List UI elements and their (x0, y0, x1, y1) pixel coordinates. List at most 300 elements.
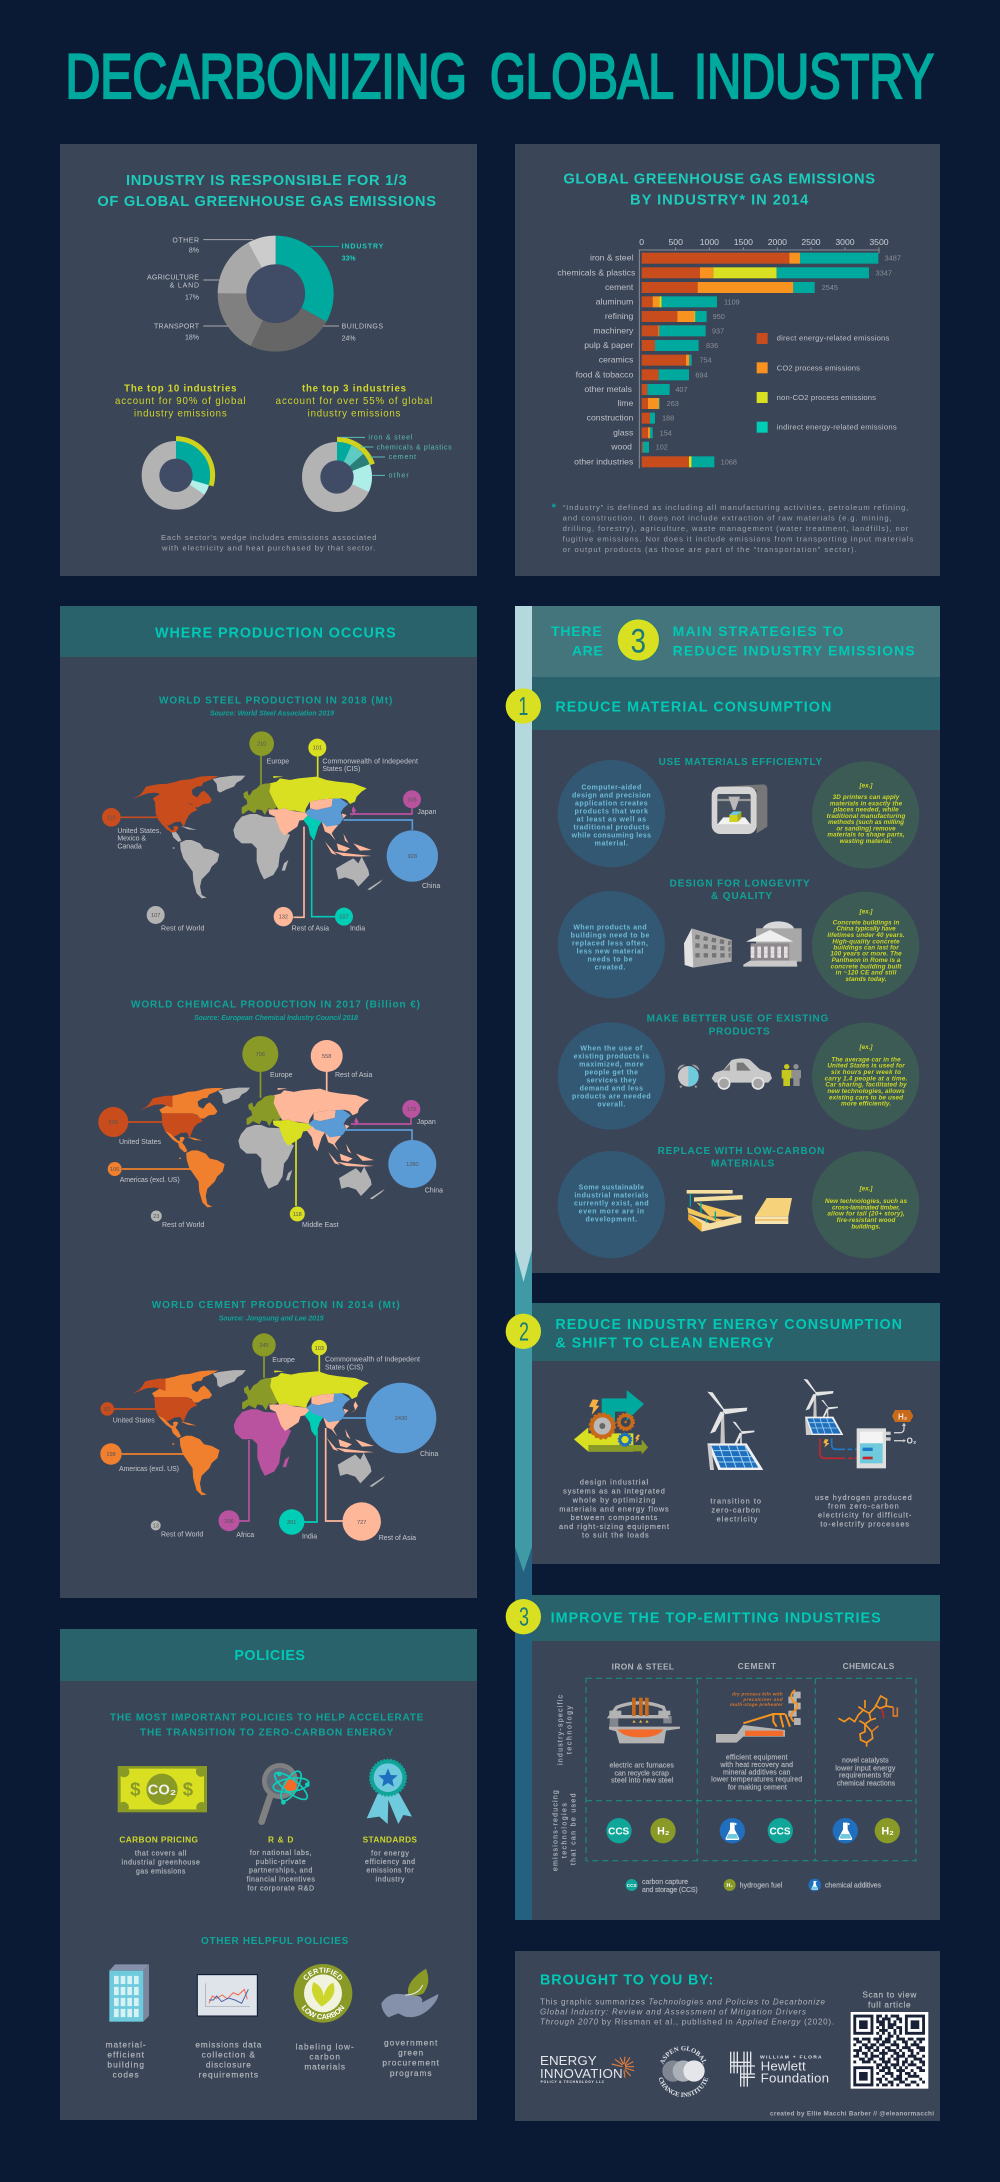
map: cement production: 301 (287, 1520, 296, 1526)
map: steel production: United States, (117, 828, 161, 835)
legend: technologies: carbon capture (642, 1879, 688, 1886)
text: procurement: government (384, 2038, 438, 2048)
badges: technologies: H₂ (881, 1825, 894, 1837)
bar chart: emissions: 3487 (885, 254, 901, 263)
block: replace with low-carbon materials: currently exist, and (574, 1201, 649, 1208)
heading: industry share: OF GLOBAL GREENHOUSE GAS EMISSIONS (97, 194, 436, 210)
subheading: other helpful policies: OTHER HELPFUL POLICIES (201, 1936, 349, 1947)
panel: three main strategies header (532, 606, 940, 677)
block: use materials efficiently: wasting material. (840, 838, 893, 845)
heading: strategy 2: & SHIFT TO CLEAN ENERGY (555, 1335, 774, 1351)
block: design for longevity (558, 879, 919, 999)
logo: Hewlett Foundation: Hewlett (761, 2059, 806, 2074)
callout: top 3 industries (276, 383, 432, 420)
heading: policies: POLICIES (234, 1648, 305, 1664)
map: chemical production: 106 (110, 1167, 119, 1173)
block: design for longevity: High-quality concrete (832, 938, 900, 945)
map: steel production: 132 (279, 915, 288, 921)
bar chart: emissions: aluminum (596, 296, 633, 306)
icon: cement kiln (716, 1690, 801, 1743)
heading: where production occurs: WHERE PRODUCTION OCCURS (155, 625, 396, 641)
title (66, 42, 934, 112)
text: carbon pricing: industrial greenhouse (121, 1860, 200, 1867)
footnote: definition of industry: * (552, 502, 557, 514)
icon: standards ribbon (367, 1760, 412, 1824)
donut chart: sectors: 17% (185, 294, 199, 301)
map: chemical production: 506 (109, 1120, 118, 1126)
text: emissions data: requirements (199, 2069, 258, 2079)
bar chart: emissions: glass (613, 427, 634, 437)
icon: cement kiln: precalciner and (742, 1697, 783, 1702)
logo: Hewlett Foundation: Foundation (761, 2071, 829, 2086)
text: scan prompt: full article (868, 1999, 911, 2009)
bar chart: emissions: construction (587, 413, 634, 423)
bar chart: emissions: other metals (584, 384, 633, 394)
block: use materials efficiently (558, 757, 919, 869)
text: R and D: for national labs, (250, 1850, 312, 1857)
icon: electric arc furnace (609, 1698, 680, 1743)
icon: green procurement hand (381, 1969, 438, 2017)
legend: emission types (757, 333, 897, 433)
icon: integrated system gears and arrows (574, 1390, 648, 1455)
icon: cement kiln: dry process kiln with (732, 1692, 783, 1697)
text: hydrogen: from zero-carbon (828, 1502, 899, 1511)
icon: 3D printer (712, 784, 767, 834)
note: wedge explanation: Each sector's wedge includes emissions associated (161, 533, 376, 542)
icon: concrete buildings (684, 921, 802, 968)
block: make better use of existing products: carry 1.4 people at a time. (825, 1075, 908, 1082)
legend: emission types: CO2 process emissions (777, 363, 860, 372)
block: replace with low-carbon materials: cross-laminated timber, (832, 1204, 900, 1211)
block: make better use of existing products: MAKE BETTER USE OF EXISTING (647, 1014, 829, 1025)
footnote: definition of industry (552, 502, 914, 554)
panel: emissions by industry (515, 144, 940, 576)
text: arc furnaces (609, 1763, 674, 1785)
legend: emission types: non-CO2 process emissions (777, 393, 876, 402)
logo: Aspen Global Change Institute (658, 2046, 708, 2098)
block: use materials efficiently: places needed, while (832, 807, 899, 814)
block: design for longevity: less new material (577, 948, 643, 955)
text: labeling (295, 2042, 354, 2072)
block: design for longevity: needs to be (587, 956, 633, 963)
block: design for longevity: concrete building built (831, 963, 902, 970)
chart heading: steel (159, 696, 392, 718)
donut chart: sectors: AGRICULTURE (147, 274, 199, 281)
map: cement production: Europe (272, 1357, 295, 1364)
block: make better use of existing products: demand and less (580, 1085, 643, 1092)
block: use materials efficiently: while consuming less (571, 832, 651, 839)
bar chart: emissions: 1500 (734, 237, 753, 247)
text: hydrogen: electricity for difficult- (818, 1511, 912, 1520)
map: chemical production: Rest of Asia (335, 1072, 372, 1079)
text: R and D (246, 1835, 315, 1892)
legend: technologies: hydrogen fuel (740, 1882, 783, 1889)
footnote: definition of industry: “Industry” is defined as including all manufacturing activities, petroleum refining, (563, 503, 908, 512)
text: zero-carbon electricity: transition to (710, 1497, 761, 1506)
map: steel production: 107 (151, 913, 160, 919)
panel: strategy 3 improve top-emitting industries (506, 1595, 940, 1920)
map: cement production: 82 (104, 1407, 110, 1413)
text: efficient equipment: efficient equipment (726, 1754, 788, 1761)
text: standards: efficiency and (365, 1859, 415, 1866)
icon: clock car and people (677, 1058, 801, 1089)
heading: strategy 2 (506, 1314, 902, 1351)
callout: top 10 industries: account for 90% of global (115, 396, 246, 407)
text: design systems: whole by optimizing (572, 1495, 655, 1504)
text: hydrogen: to-electrify processes (820, 1520, 909, 1529)
map: steel production: India (350, 926, 365, 933)
text: efficient equipment (711, 1754, 802, 1791)
map: steel production: 210 (257, 742, 266, 748)
text: carbon pricing (119, 1835, 200, 1876)
icon: emissions data chart (197, 1975, 257, 2016)
donut: top 3 industries: iron & steel (368, 435, 413, 442)
donut: top 3 industries: chemicals & plastics (377, 444, 452, 451)
column headings: CHEMICALS (843, 1661, 895, 1671)
map: steel production: Commonwealth of Indepedent (322, 758, 418, 765)
chart heading: steel: Source: World Steel Association 2019 (210, 711, 334, 718)
map: chemical production (98, 1036, 443, 1229)
panel: three main strategies header: ARE (572, 643, 603, 659)
footnote: definition of industry: and construction. It does not include extraction of raw materials (e.g. mining, (563, 514, 892, 523)
heading: strategy 2: 2 (519, 1316, 529, 1346)
map: steel production: 119 (107, 815, 116, 821)
logo: Aspen Global Change Institute: ASPEN GLOBAL (660, 2046, 706, 2065)
bar chart: emissions: food & tobacco (576, 369, 634, 379)
text: design systems: systems as an integrated (563, 1487, 665, 1496)
credit line: created by Ellie Macchi Barber // @eleanormacchi (770, 2110, 934, 2117)
block: replace with low-carbon materials: even more are in (579, 1209, 644, 1216)
block: replace with low-carbon materials: REPLACE WITH LOW-CARBON (658, 1146, 824, 1157)
map: steel production: States (CIS) (322, 766, 360, 773)
text: procurement: green (398, 2048, 424, 2058)
footnote: definition of industry: fugitive emissions. Nor does it include emissions from transporting input materials (563, 535, 914, 544)
map: cement production: India (302, 1534, 317, 1540)
block: make better use of existing products: new technologies, allows (827, 1088, 905, 1095)
heading: strategy 1 (506, 688, 831, 724)
heading: industry share: INDUSTRY IS RESPONSIBLE FOR 1/3 (126, 173, 407, 189)
callout: top 10 industries: industry emissions (134, 409, 227, 420)
text: standards (363, 1834, 417, 1884)
map: cement production: Rest of Asia (379, 1535, 416, 1542)
map: steel production: Japan (417, 809, 436, 816)
bar chart: emissions: 102 (656, 443, 668, 452)
note: wedge explanation: with electricity and heat purchased by that sector. (161, 544, 375, 553)
bar chart: emissions: 500 (668, 237, 683, 247)
block: design for longevity: in ~120 CE and still (836, 970, 897, 977)
legend: technologies (626, 1879, 881, 1894)
panel: three main strategies header: MAIN STRATEGIES TO (673, 623, 843, 639)
bar chart: emissions: 2545 (822, 283, 838, 292)
callout: top 3 industries: account for over 55% of global (276, 396, 432, 407)
block: design for longevity: DESIGN FOR LONGEVITY (670, 879, 810, 890)
text: building codes (106, 2039, 146, 2079)
block: design for longevity: buildings can last for (833, 945, 899, 952)
block: replace with low-carbon materials: allow for tall (20+ story), (827, 1211, 905, 1218)
panel: credits (515, 1951, 940, 2121)
icon: hydrogen production: H₂ (898, 1412, 908, 1421)
text: novel catalysts: requirements for (839, 1773, 892, 1780)
chart heading: cement: WORLD CEMENT PRODUCTION IN 2014 (Mt) (152, 1300, 400, 1311)
panel: three main strategies header: 3 (631, 623, 646, 661)
text: design systems: design industrial (580, 1478, 649, 1487)
text: standards: industry (375, 1877, 405, 1884)
block: replace with low-carbon materials: buildings. (851, 1223, 881, 1230)
block: use materials efficiently: application creates (575, 800, 648, 807)
block: make better use of existing products: United States is used for (827, 1063, 905, 1070)
donut chart: sectors (147, 237, 384, 342)
bar chart: emissions: 3347 (876, 268, 892, 277)
text: building codes: material- (106, 2039, 146, 2049)
chart heading: steel: WORLD STEEL PRODUCTION IN 2018 (Mt) (159, 696, 392, 707)
block: make better use of existing products: When the use of (580, 1046, 643, 1053)
text: zero-carbon electricity: electricity (717, 1515, 758, 1524)
map: cement production: 206 (224, 1519, 234, 1525)
panel: three main strategies header: REDUCE INDUSTRY EMISSIONS (673, 643, 915, 659)
block: replace with low-carbon materials: New technologies, such as (825, 1198, 907, 1205)
text: R and D: R & D (268, 1835, 293, 1845)
map: chemical production: 706 (256, 1052, 265, 1058)
text: emissions data: disclosure (206, 2059, 251, 2069)
text: efficient equipment: with heat recovery and (719, 1762, 793, 1769)
icon: catalyst molecule (838, 1696, 897, 1747)
map: chemical production: 179 (407, 1107, 416, 1113)
heading: strategy 2: REDUCE INDUSTRY ENERGY CONSUMPTION (555, 1317, 902, 1333)
map: cement production: 727 (357, 1520, 366, 1526)
column headings: CEMENT (738, 1661, 776, 1671)
block: design for longevity: & QUALITY (711, 891, 772, 902)
map: steel production: 928 (408, 854, 417, 860)
bar chart: emissions: iron & steel (590, 253, 633, 263)
map: cement production: 2430 (395, 1416, 407, 1422)
column headings (612, 1661, 895, 1671)
bar chart: emissions: 263 (667, 399, 679, 408)
bar chart: emissions: 2500 (801, 237, 821, 247)
heading: industry share (97, 173, 436, 210)
map: chemical production: 118 (293, 1212, 302, 1218)
block: make better use of existing products: existing cars to be used (829, 1094, 903, 1101)
map: cement production: 13 (153, 1524, 159, 1530)
text: standards: emissions for (366, 1868, 414, 1875)
text: emissions data: emissions data (195, 2039, 262, 2049)
block: design for longevity: 100 years or more. The (830, 951, 902, 958)
callout: top 10 industries (115, 383, 246, 420)
badges: technologies: CCS (608, 1826, 630, 1837)
donut chart: sectors: & LAND (170, 282, 199, 289)
text: standards: for energy (371, 1850, 409, 1857)
heading: brought to you by: BROUGHT TO YOU BY: (540, 1973, 713, 1989)
map: steel production (102, 731, 440, 933)
heading: strategy 3: 3 (519, 1602, 529, 1632)
block: use materials efficiently: methods (such as milling (828, 819, 904, 826)
subheading: most important policies: THE TRANSITION TO ZERO-CARBON ENERGY (140, 1727, 394, 1738)
text: building codes: building (107, 2059, 144, 2069)
logo: Hewlett Foundation: WILLIAM + FLORA (760, 2054, 822, 2060)
chart heading: chemicals: WORLD CHEMICAL PRODUCTION IN 2017 (Billion €) (131, 1000, 420, 1011)
row labels: emissions-reducing (553, 1790, 560, 1871)
row labels: technology (567, 1705, 574, 1754)
row labels: that can be used (570, 1793, 577, 1865)
map: steel production: 105 (407, 797, 417, 803)
subheading: most important policies: THE MOST IMPORTANT POLICIES TO HELP ACCELERATE (110, 1713, 424, 1724)
map: chemical production: Americas (excl. US) (120, 1177, 180, 1184)
icon: cement kiln: multi-stage preheater (730, 1702, 784, 1707)
map: chemical production: 23 (153, 1214, 159, 1220)
donut chart: sectors: INDUSTRY (342, 243, 384, 250)
block: make better use of existing products: maximized, more (579, 1062, 644, 1069)
text: design systems: between components (571, 1513, 658, 1522)
map: cement production: 245 (259, 1343, 269, 1349)
badges: technologies: CCS (769, 1826, 791, 1837)
logo: Energy Innovation (540, 2053, 634, 2084)
heading: emissions by industry (563, 171, 875, 209)
icon: carbon pricing banknote: CO₂ (148, 1783, 176, 1799)
bar chart: emissions: 754 (699, 356, 712, 365)
heading: strategy 3: IMPROVE THE TOP-EMITTING INDUSTRIES (551, 1611, 881, 1627)
logo: Energy Innovation: ENERGY (540, 2053, 597, 2068)
block: replace with low-carbon materials: industrial materials (574, 1193, 648, 1200)
heading: strategy 1: 1 (518, 691, 528, 721)
donut chart: sectors: OTHER (172, 237, 199, 244)
icon: research magnifier and atom (262, 1765, 311, 1822)
bar chart: emissions: lime (617, 398, 634, 408)
donut: top 3 industries (299, 435, 452, 515)
bar chart: emissions: cement (605, 282, 634, 292)
icon: wind turbines and solar panel (707, 1392, 763, 1470)
block: make better use of existing products: products are needed (572, 1093, 651, 1100)
row labels: technologies (562, 1803, 569, 1858)
block: use materials efficiently: or sanding) remove (836, 825, 896, 832)
legend: emission types: direct energy-related emissions (777, 334, 890, 343)
block: design for longevity: created. (595, 964, 625, 971)
legend: technologies: and storage (CCS) (642, 1887, 698, 1894)
bar chart: emissions: refining (605, 311, 634, 321)
heading: strategy 3 (506, 1599, 881, 1634)
donut chart: sectors: 33% (342, 255, 356, 262)
block: design for longevity: Concrete buildings in (833, 920, 899, 927)
map: cement production: Americas (excl. US) (119, 1466, 179, 1473)
text: carbon pricing: gas emissions (136, 1869, 186, 1876)
block: make better use of existing products: services they (586, 1078, 636, 1085)
text: efficient equipment: mineral additives can (723, 1769, 790, 1776)
chart heading: chemicals: Source: European Chemical Industry Council 2018 (194, 1015, 358, 1022)
text: zero-carbon electricity: zero-carbon (711, 1506, 760, 1515)
bar chart: emissions: 2000 (768, 237, 787, 247)
block: use materials efficiently: materials in exactly the (830, 800, 903, 807)
row labels (553, 1694, 577, 1871)
row labels: industry-specific (557, 1694, 564, 1765)
text: carbon pricing: that covers all (135, 1851, 187, 1858)
text: arc furnaces: can recycle scrap (614, 1770, 669, 1777)
block: use materials efficiently: materials to shape parts, (827, 832, 905, 839)
text: citation: This graphic summarizes Technologies and Policies to Decarbonize (540, 1997, 826, 2006)
bar chart: emissions: pulp & paper (584, 340, 633, 350)
icon: low carbon badge (294, 1964, 352, 2023)
map: chemical production: Rest of World (162, 1222, 204, 1229)
footnote: definition of industry: or output products (as those are part of the “transportation” sector). (563, 545, 857, 554)
text: arc furnaces: electric arc furnaces (609, 1763, 674, 1770)
panel: policies (60, 1629, 477, 2120)
donut chart: sectors: TRANSPORT (154, 324, 200, 331)
icon: low carbon badge: CERTIFIED (304, 1968, 342, 1980)
text: hydrogen (815, 1493, 912, 1529)
text: novel catalysts (835, 1758, 896, 1787)
map: cement production: 103 (315, 1346, 324, 1352)
block: use materials efficiently: 3D printers can apply (833, 794, 900, 801)
donut chart: sectors: 24% (342, 335, 356, 342)
icon: cross-laminated timber (687, 1190, 792, 1232)
icon: carbon pricing banknote: $ (183, 1778, 194, 1799)
block: make better use of existing products: overall. (597, 1102, 625, 1109)
block: use materials efficiently: design and precision (572, 792, 651, 799)
donut: top 3 industries: other (389, 472, 409, 479)
callout: top 3 industries: the top 3 industries (302, 383, 406, 394)
heading: strategy 1: REDUCE MATERIAL CONSUMPTION (555, 700, 831, 716)
map: steel production: 107 (339, 915, 349, 921)
block: make better use of existing products: The average car in the (831, 1057, 901, 1064)
text: R and D: financial incentives (246, 1877, 315, 1884)
bar chart: emissions: 188 (662, 414, 674, 423)
map: cement production: 198 (106, 1452, 116, 1458)
dashed grid (586, 1678, 916, 1861)
text: scan prompt (862, 1989, 917, 2009)
text: labeling: materials (304, 2062, 345, 2072)
legend: technologies: CCS (627, 1883, 637, 1888)
block: design for longevity: stands today. (845, 976, 887, 983)
bar chart: emissions: 3000 (835, 237, 855, 247)
logo: Energy Innovation: INNOVATION (540, 2066, 623, 2081)
badges: technologies (606, 1818, 900, 1843)
bar chart: emissions: 1109 (724, 297, 740, 306)
map: cement production (100, 1333, 438, 1542)
text: labeling: labeling low- (295, 2042, 354, 2052)
block: make better use of existing products: Car sharing, facilitated by (825, 1082, 907, 1089)
block: make better use of existing products: PRODUCTS (709, 1026, 770, 1037)
block: make better use of existing products: [ex.] (858, 1044, 873, 1051)
logo: Aspen Global Change Institute: CHANGE INSTITUTE (658, 2077, 708, 2098)
panel: three main strategies header: THERE (551, 623, 602, 639)
map: cement production: China (420, 1451, 438, 1458)
bar chart: emissions: 3500 (869, 237, 889, 247)
text: R and D: partnerships, and (249, 1868, 312, 1875)
text: scan prompt: Scan to view (862, 1989, 917, 1999)
bar chart: emissions: 937 (712, 326, 724, 335)
logo: Hewlett Foundation (731, 2052, 829, 2087)
bar chart: emissions: 407 (675, 385, 688, 394)
text: design systems: materials and energy flows (559, 1504, 669, 1513)
block: replace with low-carbon materials: MATERIALS (711, 1159, 775, 1170)
text: efficient equipment: lower temperatures required (711, 1777, 802, 1784)
block: make better use of existing products: more efficiently. (841, 1101, 891, 1108)
bar chart: emissions: 836 (706, 341, 718, 350)
block: design for longevity: China typically have (836, 926, 896, 933)
callout: top 3 industries: industry emissions (308, 409, 401, 420)
block: replace with low-carbon materials (558, 1146, 919, 1258)
block: design for longevity: buildings need to be (571, 932, 649, 939)
text: standards: STANDARDS (363, 1834, 417, 1844)
text: design systems: to suit the loads (582, 1531, 649, 1540)
block: design for longevity: [ex.] (858, 909, 873, 916)
text: citation (540, 1997, 834, 2027)
title: DECARBONIZING (66, 42, 467, 112)
map: chemical production: Europe (270, 1072, 293, 1079)
icon: low carbon badge: LOW CARBON (302, 2004, 344, 2020)
text: novel catalysts: novel catalysts (842, 1758, 889, 1765)
block: use materials efficiently: Computer-aided (581, 784, 641, 791)
text: arc furnaces: steel into new steel (611, 1778, 674, 1785)
block: replace with low-carbon materials: Some sustainable (579, 1185, 644, 1192)
bar chart: emissions: other industries (574, 456, 634, 466)
